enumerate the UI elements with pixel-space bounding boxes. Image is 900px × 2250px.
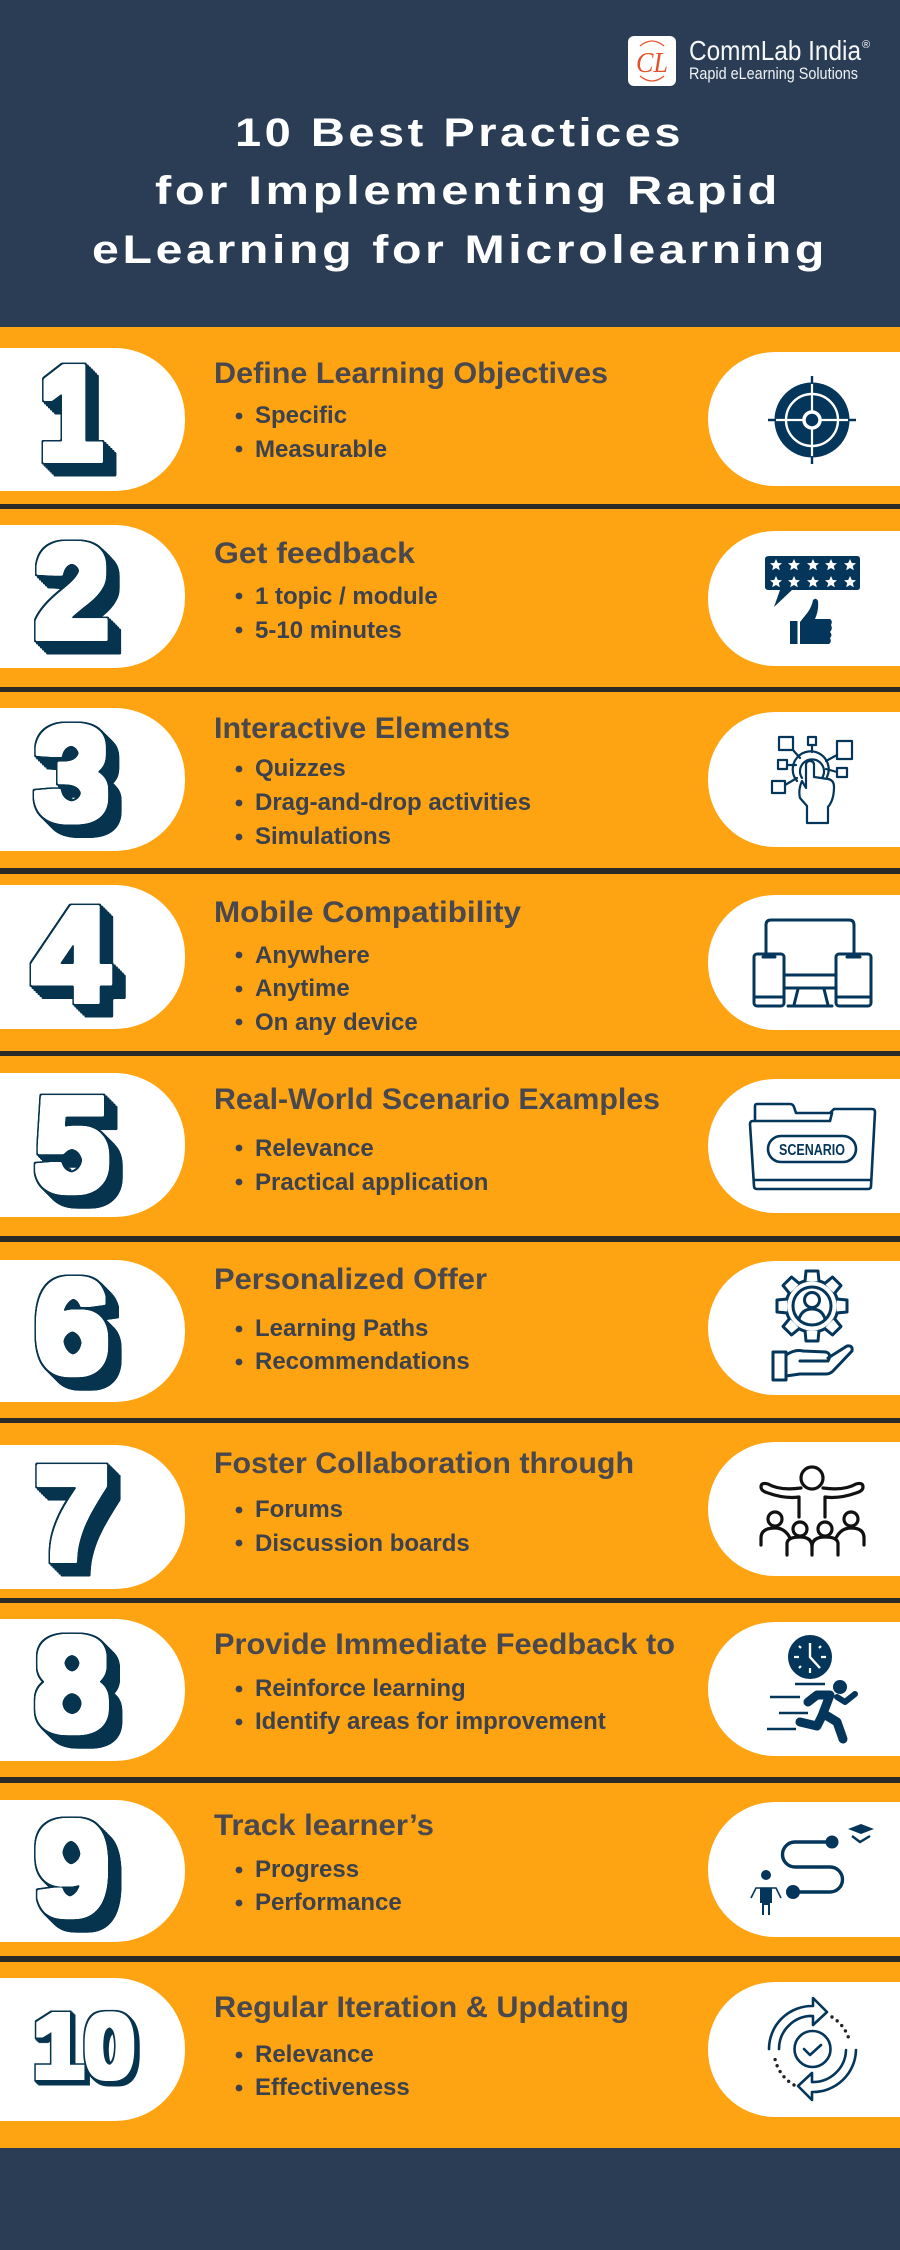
panel: item 9 [0, 1795, 900, 1942]
bullet list: Anytime [255, 975, 350, 1002]
bullet list [236, 402, 387, 463]
number badge 6: 6 [35, 1253, 109, 1400]
header background [0, 0, 900, 327]
heading: Real-World Scenario Examples [214, 1083, 660, 1116]
bullet list: 5-10 minutes [255, 617, 402, 644]
bullet list: Progress [255, 1856, 359, 1883]
bullet list [236, 2041, 410, 2101]
icon: scenario folder [708, 1079, 900, 1213]
bullet list: Forums [255, 1496, 343, 1523]
heading: Foster Collaboration through [214, 1447, 634, 1480]
number badge 4: 4 [33, 881, 109, 1028]
number badge 2: 2 [35, 518, 109, 665]
bullet list: Simulations [255, 823, 391, 850]
title [92, 111, 828, 272]
logo: CommLab India [628, 35, 870, 86]
bullet list [236, 1856, 402, 1916]
bullet list [236, 583, 438, 644]
heading: Get feedback [214, 537, 415, 570]
bullet list [236, 755, 531, 850]
bullet list [236, 1496, 470, 1557]
panel: item 5 [0, 1071, 900, 1218]
bullet list: Relevance [255, 1135, 374, 1162]
number badge 9 [0, 1795, 185, 1942]
number badge 5: 5 [35, 1071, 109, 1218]
bullet list: Anywhere [255, 942, 370, 969]
panel: item 2 [0, 518, 900, 668]
number badge 7: 7 [35, 1440, 109, 1587]
panel: item 4 [0, 881, 900, 1036]
logo: CommLab India: ® [862, 39, 870, 51]
panel: item 1 [0, 340, 900, 491]
panel: item 8 [0, 1611, 900, 1761]
number badge 5 [0, 1071, 185, 1218]
bullet list: Practical application [255, 1169, 488, 1196]
number badge 2 [0, 518, 185, 668]
title: 10 Best Practices [235, 111, 684, 155]
heading: Provide Immediate Feedback to [214, 1628, 675, 1661]
number badge 3: 3 [35, 700, 109, 847]
number badge 10: 10 [33, 1997, 135, 2097]
heading: Personalized Offer [214, 1263, 487, 1296]
bullet list: Relevance [255, 2041, 374, 2068]
number badge 8: 8 [35, 1611, 109, 1758]
icon: devices [708, 895, 900, 1030]
bullet list: On any device [255, 1009, 418, 1036]
bullet list: Discussion boards [255, 1530, 470, 1557]
number badge 1: 1 [40, 340, 102, 487]
logo: CommLab India: CommLab India [689, 35, 861, 66]
separators [0, 504, 900, 1962]
number badge 9: 9 [35, 1795, 109, 1942]
number badge 3 [0, 700, 185, 851]
icon: learning path [708, 1802, 900, 1937]
heading: Interactive Elements [214, 712, 510, 745]
panel: item 6 [0, 1253, 900, 1402]
heading: Regular Iteration & Updating [214, 1991, 629, 2024]
bullet list: Learning Paths [255, 1315, 428, 1342]
number badge 4 [0, 881, 185, 1029]
bullet list [236, 1135, 488, 1196]
icon: gear, person and hand [708, 1261, 900, 1395]
bullet list [236, 1315, 470, 1375]
bullet list: Effectiveness [255, 2074, 410, 2101]
icon: target [708, 352, 900, 486]
heading: Mobile Compatibility [214, 896, 521, 929]
panel: item 3 [0, 700, 900, 851]
logo: CommLab India: CL [636, 47, 668, 79]
icon: rating and thumbs up [708, 531, 900, 666]
footer band [0, 2148, 900, 2250]
bullet list: 1 topic / module [255, 583, 438, 610]
number badge 1 [0, 340, 185, 491]
icon: group collaboration [708, 1442, 900, 1576]
icon: iteration cycle [708, 1982, 900, 2117]
bullet list: Identify areas for improvement [255, 1708, 606, 1735]
panel: item 10 [0, 1978, 900, 2121]
bullet list: Quizzes [255, 755, 346, 782]
title: eLearning for Microlearning [92, 228, 828, 272]
number badge 8 [0, 1611, 185, 1761]
bullet list: Recommendations [255, 1348, 470, 1375]
bullet list [236, 1675, 606, 1735]
bullet list: Performance [255, 1889, 402, 1916]
number badge 10 [0, 1978, 185, 2121]
title: for Implementing Rapid [155, 169, 781, 213]
icon: scenario folder: SCENARIO [779, 1142, 845, 1159]
number badge 7 [0, 1440, 185, 1589]
heading: Define Learning Objectives [214, 357, 608, 390]
number badge 6 [0, 1253, 185, 1402]
heading: Track learner’s [214, 1809, 434, 1842]
bullet list [236, 942, 418, 1036]
panel: item 7 [0, 1440, 900, 1589]
bullet list: Drag-and-drop activities [255, 789, 531, 816]
icon: clock and runner [708, 1622, 900, 1756]
bullet list: Measurable [255, 436, 387, 463]
bullet list: Reinforce learning [255, 1675, 466, 1702]
icon: touch interaction [708, 712, 900, 847]
bullet list: Specific [255, 402, 347, 429]
logo: CommLab India: Rapid eLearning Solutions [689, 64, 858, 83]
